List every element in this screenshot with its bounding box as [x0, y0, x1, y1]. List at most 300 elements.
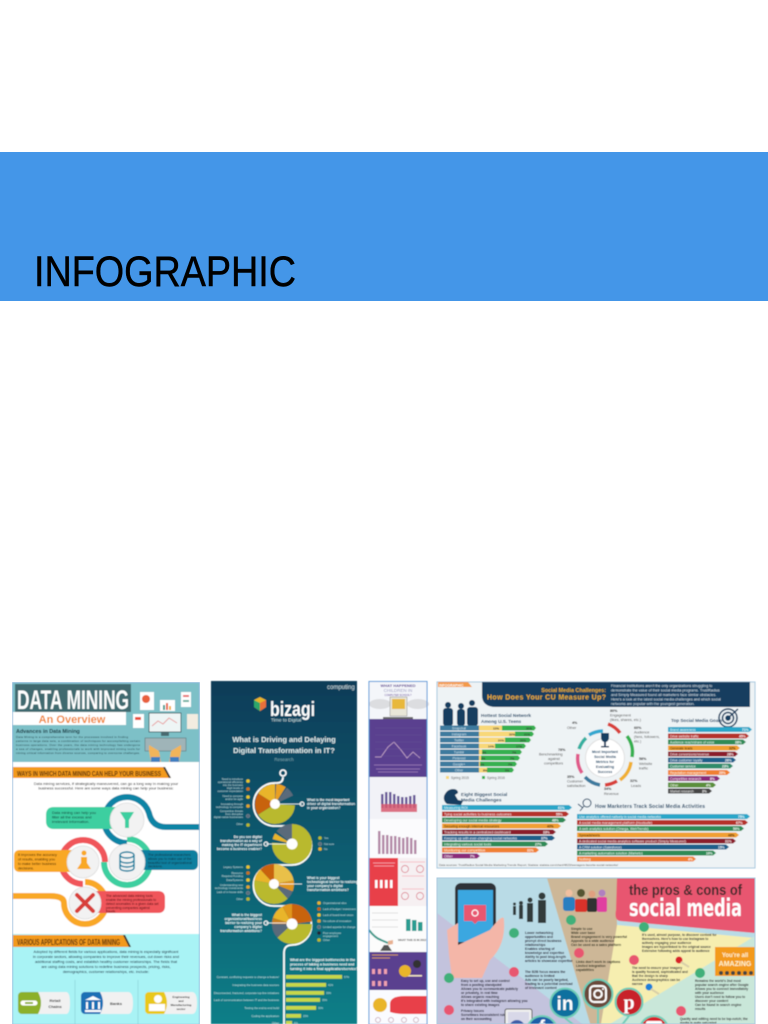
donut 4 callout: company's digital: [234, 925, 262, 929]
title band: [0, 152, 768, 301]
donut 3 legend: Lack of in-house skills: [217, 890, 244, 894]
radial metrics: Success: [598, 770, 612, 774]
text: twitter pros and cons: The B2B focus means the: [525, 970, 565, 974]
radial metrics: Customer: [567, 780, 584, 784]
bars: goals: Drive customer loyalty: [670, 758, 703, 762]
card: banks: Banks: [110, 1001, 123, 1006]
donut 4 legend: Lack of budget / investment: [323, 907, 356, 911]
text: twitter pros and cons: audience is limited: [525, 974, 554, 978]
marker: start ring: [280, 770, 286, 776]
stacked bars: teens: Instagram: [452, 732, 467, 736]
heading: What is Driving and Delaying: [232, 735, 336, 744]
badge: you're all amazing: AMAZING: [719, 961, 752, 968]
donut 4 legend: Lack of board-level vision: [323, 913, 354, 917]
bar chart heading: [290, 958, 358, 971]
bars: challenges: Tying social activities to business outcomes: [444, 812, 512, 816]
bars: challenges: Integrating various social tools: [444, 842, 491, 846]
donut 2 callout: [217, 835, 286, 851]
bars: challenges: 55%: [556, 812, 563, 816]
text: facebook pros and cons: to share existing images: [461, 1003, 500, 1007]
radial metrics: 4%: [572, 721, 578, 725]
text: facebook pros and cons: Sometimes inconsistent rules: [461, 1013, 508, 1017]
radial metrics: 34%: [604, 787, 612, 791]
stacked bars: teens: [440, 726, 536, 772]
text: instagram pros and cons: Simple to use: [571, 927, 593, 931]
text: youtube pros and cons: discover your content: [695, 999, 729, 1003]
donut 1 legend: [214, 777, 250, 827]
bar chart: 15%: [303, 1014, 309, 1018]
text: instagram pros and cons: Brand engagement is very powerful: [571, 935, 627, 939]
text: instagram pros and cons: Limited integration: [576, 964, 606, 968]
text: youtube pros and cons: Allows you to connect immediately: [695, 987, 748, 991]
radial metrics: Engagement: [610, 714, 631, 718]
connector stems: [565, 1009, 629, 1024]
section: applications: demographics, customer relationships, etc. include:: [63, 970, 149, 974]
title block: [616, 878, 755, 933]
donut 1 legend: Need to introduce: [222, 777, 244, 781]
text: youtube pros and cons: Users don't need to follow you to: [695, 995, 745, 999]
bars: track: 50%: [733, 827, 740, 831]
icons: pros and cons badges: [444, 915, 705, 1016]
bars: goals: 4%: [706, 784, 711, 788]
donut 3 callout: What is your biggest: [307, 876, 340, 880]
panel: social media challenges: [437, 682, 755, 868]
step: accuracy: decisions.: [18, 866, 34, 870]
card: retail chains: Retail: [50, 998, 60, 1003]
text: twitter pros and cons: Lower networking: [525, 931, 553, 935]
bars: track: A web analytics solution (Omega, WebTrends): [579, 827, 649, 831]
donut 1: [265, 794, 285, 814]
text: youtube pros and cons: [680, 979, 749, 1024]
header block: An Overview: [39, 714, 106, 726]
donut 3 callout: [280, 876, 358, 892]
bars: challenges: Developing our social media strategy: [444, 818, 502, 822]
header block: DATA MINING: [17, 685, 129, 715]
bars: track: 31%: [725, 840, 732, 844]
bars: goals: 28%: [727, 752, 734, 756]
text: instagram pros and cons: Can be used as a sales platform: [571, 943, 621, 947]
radial metrics: Metrics for: [596, 760, 615, 764]
bars: challenges: Securing enough internal resources: [444, 824, 500, 828]
donut 3 legend: Legacy Systems: [223, 865, 244, 869]
bars: track: A marketing automation solution (Marketo): [579, 852, 643, 856]
section: bar charts: [369, 777, 427, 858]
bars: track: A social media management platform (Hootsuite): [579, 821, 652, 825]
radial metrics: Evaluating: [596, 765, 614, 769]
step: filter: irrelevant information.: [52, 819, 89, 824]
snake path: [254, 777, 312, 1024]
stacked bars: teens: 35%: [526, 726, 532, 730]
text: youtube pros and cons: popular search engine after Google: [695, 983, 749, 987]
heading: hottest networks: Among U.S. Teens: [481, 719, 522, 724]
bars: track: Use analytics offered natively in social media networks: [579, 815, 661, 819]
donut 3 callout: technological barrier to realizing: [307, 880, 358, 884]
stacked bars: teens: Google+: [453, 762, 465, 766]
step: database: [109, 844, 198, 880]
header block: mining critical information from diverse sources, comparing to overcome challenges.: [16, 751, 140, 755]
text: twitter pros and cons: knowledge and expertise: [525, 951, 564, 955]
text: pinterest pros and cons: Images are hyperlinked to the original source: [642, 945, 711, 949]
bars: challenges: 61%: [558, 806, 565, 810]
bars: challenges: Other: [444, 854, 454, 858]
radial metrics: 35%: [567, 775, 575, 779]
text: twitter pros and cons: leading to a potential overload: [525, 982, 573, 986]
bars: goals: Reputation management: [670, 771, 706, 775]
text: pinterest pros and cons: actively engaging your audience: [642, 941, 691, 945]
bar chart: Constant, conflicting requests to change a feature/: [217, 975, 279, 979]
stacked bars: teens: 32%: [509, 732, 515, 736]
step: tools: frauds.: [106, 910, 116, 914]
radial metrics: traffic: [639, 766, 648, 770]
stacked bars: teens: 24%: [498, 738, 504, 742]
text: pinterest pros and cons: is quality focused, sophisticated and: [632, 970, 688, 974]
text: twitter pros and cons: articles to showcase expertise: [525, 959, 573, 963]
bars: goals: Brand awareness: [670, 728, 696, 732]
donut 2 callout: Do you see digital: [234, 835, 262, 839]
donut 1 callout: What is the most important: [307, 798, 350, 802]
bars: goals: 38%: [735, 740, 742, 744]
flow diagram: ways: [12, 797, 200, 924]
icon: instagram: [584, 980, 612, 1008]
bars: track: 75%: [738, 815, 745, 819]
stacked bars: teens: Other: [455, 768, 464, 772]
icon: linkedin: in: [557, 994, 573, 1015]
text: facebook pros and cons: Allows you to communicate publicly: [461, 987, 518, 991]
donut 4 callout: [220, 913, 286, 933]
heading: [232, 735, 336, 755]
legend: Spring 2016: [487, 776, 505, 780]
radial metrics: (likes, shares, etc.): [610, 718, 641, 722]
text: twitter pros and cons: Ability to post blog-length: [525, 955, 566, 959]
donut 2 callout: transformation as a way of: [220, 839, 263, 843]
donut 2 callout: become a business enabler?: [217, 847, 262, 851]
header block: a sea of changes, enabling professionals to work with improved mining tools for: [16, 747, 140, 751]
text: twitter pros and cons: [525, 931, 573, 990]
legend: [446, 776, 505, 780]
icon: red pin: [676, 956, 689, 967]
text: facebook pros and cons: from a posting standpoint: [461, 983, 503, 987]
stacked bars: teens: 7%: [510, 756, 515, 760]
section: teal chart: WHAT THIS IS IN 2012: [398, 938, 427, 942]
donut 1 legend: Innovating through: [221, 802, 244, 806]
bars: track: 4%: [688, 858, 693, 862]
donut 1 legend: operational efficiency: [218, 780, 244, 784]
donut 3 callout: your company's digital: [307, 884, 343, 888]
text: youtube pros and cons: results: [695, 1007, 706, 1011]
text: instagram pros and cons: [571, 927, 627, 972]
radial metrics: [539, 709, 660, 796]
donut 1 legend: Competitive threats: [220, 809, 244, 813]
radial metrics: (fans, followers,: [634, 735, 660, 739]
bar chart heading: process of taking a business need and: [290, 962, 354, 966]
step: filter: [46, 803, 144, 837]
donut 2 callout: making the IT department: [222, 843, 263, 847]
icon: pinterest: p: [623, 992, 635, 1014]
bars: challenges: Monitoring our competition: [444, 848, 485, 852]
banner: How Does Your CU Measure Up?: [487, 694, 606, 702]
radial metrics: Social Media: [594, 755, 617, 759]
step: database: The professional researchers: [148, 853, 191, 857]
radial metrics: against: [548, 757, 560, 761]
bar chart: 57%: [344, 975, 350, 979]
step: tools: detect anomalies in a given data set: [106, 902, 159, 906]
text: facebook pros and cons: [461, 979, 528, 1021]
intro text: business successful. Here are some ways data mining can help your business:: [38, 786, 174, 790]
donut 4 callout: barrier to realizing your: [225, 921, 263, 925]
banner: Social Media Challenges:: [541, 688, 606, 694]
badge: you're all amazing: You're all: [722, 953, 748, 959]
stacked bars: teens: Pinterest: [452, 756, 466, 760]
intro text: Data mining services, if strategically maneuvered, can go a long way in making your: [34, 781, 179, 786]
section: red statistics: [369, 858, 427, 906]
text: facebook pros and cons: Privacy issues: [461, 1009, 484, 1013]
donut 4 callout: What is the biggest: [232, 913, 263, 917]
donut 4 legend: Limited appetite for change: [323, 925, 356, 929]
bars: track: A CRM solution (Salesforce): [579, 846, 622, 850]
tag: INFOGRAPHIC: [439, 684, 464, 688]
step: tools: The advanced data mining tools: [106, 894, 153, 898]
icon: phone in hand: [447, 883, 504, 978]
section: line chart: [369, 719, 427, 777]
donut 1 callout: in your organization?: [307, 806, 341, 810]
section: applications: Adopted by different fields for various applications, data mining is especially significant: [34, 950, 179, 954]
bars: challenges: 7%: [470, 854, 475, 858]
text: instagram pros and cons: Wide user base: [571, 931, 595, 935]
header block: Advances in Data Mining: [16, 729, 80, 735]
donut 4 legend: No culture of innovation: [323, 919, 352, 923]
donut 3 legend: Data/Systems: [226, 878, 244, 882]
card: engineering: Engineering: [172, 995, 190, 999]
bar chart: 39%: [326, 991, 332, 995]
text: facebook pros and cons: on their accounting: [461, 1017, 492, 1021]
donut 2: [282, 834, 302, 854]
bars: challenges: 40%: [547, 824, 554, 828]
donut 1 legend: digital-native businesses: [214, 815, 244, 819]
text: facebook pros and cons: Allows organic reaching: [461, 995, 499, 999]
text: youtube pros and cons: Quality and editing need to be top-notch; the: [680, 1017, 748, 1021]
subheading: Research: [274, 757, 294, 762]
radial metrics: 32%: [630, 779, 638, 783]
text: twitter pros and cons: of irrelevant content: [525, 986, 558, 990]
section: speech bubble: [369, 990, 427, 1024]
bar chart: Integrating the business data sources: [232, 983, 280, 987]
text: twitter pros and cons: Ads can be poorly targeted,: [525, 978, 569, 982]
radial metrics: satisfaction: [567, 784, 585, 788]
icon: facebook: [527, 1016, 557, 1024]
radial metrics: Audience: [634, 730, 649, 734]
donut 1 legend: into the business: [223, 783, 244, 787]
text: twitter pros and cons: relationships: [525, 943, 546, 947]
step: accuracy: It improves the accuracy: [18, 853, 57, 857]
bars: goals: Generate leads: [670, 746, 693, 750]
donut 3: [264, 874, 284, 894]
icon: influencer figures: [513, 892, 546, 923]
bars: track: 67%: [736, 821, 743, 825]
text: facebook pros and cons: It's integrated with Instagram allowing you: [461, 999, 528, 1003]
banner: ways: [12, 767, 171, 778]
bizagi wordmark: bizagi: [270, 699, 315, 721]
bar chart: 35%: [322, 998, 328, 1002]
card: banks: [81, 992, 133, 1014]
donut 4 legend: [317, 901, 356, 942]
donut 4 legend: Poor employee: [323, 931, 342, 935]
text: facebook pros and cons: or privately, in real time: [461, 991, 498, 995]
stacked bars: teens: 2%: [481, 756, 486, 760]
text: pinterest pros and cons: It's used, almost purpose, to discover content for: [642, 933, 717, 937]
card: engineering: [145, 992, 197, 1014]
panel: tall purple infographic: [369, 681, 429, 1024]
radial metrics: Leads: [631, 784, 641, 788]
stacked bars: teens: 20%: [520, 738, 526, 742]
icon: group of people: [563, 889, 607, 912]
banner: Financial institutions aren't the only organizations struggling to: [611, 684, 712, 688]
stacked bars: teens: Facebook: [452, 744, 467, 748]
heading: challenges: [444, 789, 507, 805]
bars: challenges: 31%: [527, 848, 534, 852]
section: applications: are using data mining solutions to redefine business prospects, pricing, risks,: [41, 965, 171, 969]
donut 1 legend: High levels of: [227, 786, 243, 790]
banner: [482, 682, 750, 707]
tagline: Time to Digital: [271, 718, 301, 724]
badge: you're all amazing: [715, 947, 755, 976]
bars: track: 46%: [728, 834, 735, 838]
intro text: [34, 781, 179, 790]
text: pinterest pros and cons: narrow: [632, 982, 643, 986]
bars: goals: 8%: [710, 777, 715, 781]
donut 1 legend: technology to compete: [216, 805, 244, 809]
text: facebook pros and cons: Easy to set up, use and control: [461, 979, 510, 983]
donut 3 callout: transformation ambitions?: [307, 888, 349, 892]
bars: goals: Market research: [670, 790, 694, 794]
donut 1 legend: from disruptive: [225, 812, 244, 816]
card: engineering: and: [178, 999, 184, 1003]
heading and computer: COMPUTER SCHOOL?: [385, 694, 412, 697]
icon: target: [719, 709, 738, 727]
title block: the pros & cons of: [629, 882, 743, 899]
text: pinterest pros and cons: that the design is sharp: [632, 974, 668, 978]
bars: track: [577, 814, 750, 862]
bar chart: Disconnected, fractured, corporate top-line initiatives: [214, 991, 280, 995]
radial metrics: 58%: [639, 757, 647, 761]
radial metrics: 60%: [634, 726, 642, 730]
donut 4 legend: Other: [323, 938, 330, 942]
section: applications: VARIOUS APPLICATIONS OF DATA MINING: [17, 938, 120, 947]
bar chart: Coding the application: [251, 1014, 279, 1018]
bar chart: Testing the end-to-end build: [244, 1006, 279, 1010]
stacked bars: teens: Tumblr: [454, 750, 465, 754]
bars: track: Spreadsheets: [579, 834, 600, 838]
text: instagram pros and cons: Appeals to a wide audience: [571, 939, 614, 943]
donut 1 legend: Other: [236, 822, 243, 826]
stacked bars: teens: 1%: [480, 762, 485, 766]
bars: goals: 45%: [739, 734, 746, 738]
donut 1 callout: driver of digital transformation: [307, 802, 355, 806]
bars: challenges: 27%: [535, 842, 542, 846]
bars: goals: Other: [670, 784, 679, 788]
text: pinterest pros and cons: Audience demographics can be: [632, 978, 680, 982]
icon: linkedin: [550, 988, 580, 1018]
bars: track: 15%: [718, 846, 725, 850]
stacked bars: teens: 7%: [508, 762, 513, 766]
heading: track: How Marketers Track Social Media Activities: [595, 804, 705, 810]
step: accuracy: to make better business: [18, 862, 56, 866]
stacked bars: teens: 7%: [512, 750, 517, 754]
text: youtube pros and cons: Remains the world's 2nd most: [695, 979, 742, 983]
step: accuracy: [14, 846, 99, 878]
banner: and Simply Measured found all marketers face similar obstacles.: [611, 693, 716, 697]
text: youtube pros and cons: with your audience: [694, 991, 724, 995]
panel: data mining infographic: [12, 682, 200, 1024]
text: instagram pros and cons: Links don't work in captions: [576, 960, 621, 964]
bars: goals: 3%: [702, 790, 707, 794]
text: twitter pros and cons: opportunities and: [525, 935, 553, 939]
stacked bars: teens: 13%: [493, 726, 499, 730]
banner: networks are popular with the youngest generation.: [611, 702, 695, 706]
donut 2 legend: Not sure: [324, 842, 335, 846]
stacked bars: teens: 17%: [516, 744, 522, 748]
step: database: beautiful tool of organizational: [148, 861, 192, 865]
bars: goals: Competitive research: [670, 777, 701, 781]
bars: goals: 32%: [729, 746, 736, 750]
stacked bars: teens: 14%: [488, 744, 494, 748]
header block: [12, 682, 200, 762]
stacked bars: teens: 5%: [505, 768, 510, 772]
computing logo: computing: [327, 685, 355, 691]
bars: goals: Drive conversions/revenue: [670, 752, 709, 756]
step: accuracy: of results, enabling you: [18, 858, 55, 862]
bars: goals: Customer service: [670, 764, 696, 768]
donut 3 legend: Required Funding: [222, 874, 243, 878]
banner: demonstrate the value of their social media programs. TrustRadius: [611, 688, 720, 692]
stacked bars: teens: 8%: [483, 768, 488, 772]
section: applications: in corporate sectors, allowing companies to improve their revenues, cut down risks and: [33, 955, 179, 959]
radial metrics: 80%: [610, 709, 618, 713]
heading and computer: WHAT HAPPENED: [380, 683, 416, 688]
bars: track: A dedicated social media analytics software product (Simply Measured): [579, 840, 686, 844]
donut 1 legend: customer expectation: [217, 789, 244, 793]
bar chart: Lack of communication between IT and the business: [214, 998, 280, 1002]
donut 3 legend: Understanding new: [220, 883, 243, 887]
icon: pinterest: [616, 988, 642, 1016]
heading and computer: CHILDREN IN: [384, 688, 412, 693]
radial metrics: Benchmarking: [539, 752, 563, 756]
legend: Spring 2015: [451, 776, 469, 780]
panel: pros and cons of social media: [437, 878, 755, 1024]
wedge backgrounds: [437, 878, 755, 1024]
donut 1 legend: Need to compete: [223, 794, 244, 798]
donut 1 legend: and/or be agile: [225, 797, 244, 801]
panel: bizagi infographic: [211, 681, 358, 1024]
donut 2 legend: [318, 836, 335, 851]
stacked bars: teens: 21%: [524, 732, 530, 736]
heading: hottest networks: Hottest Social Network: [481, 713, 531, 718]
bar chart heading: What are the biggest bottlenecks in the: [290, 958, 355, 962]
icon: bizagi logo: [254, 697, 266, 711]
radial metrics: Other: [567, 726, 577, 730]
bars: goals: 23%: [722, 764, 729, 768]
donut 3 legend: technology investments: [215, 886, 244, 890]
bar chart: 30%: [318, 1006, 324, 1010]
radial metrics: competitors: [544, 762, 563, 766]
icon: computer and charts: [133, 692, 198, 762]
step: database: decisions.: [148, 864, 163, 868]
donut 4 legend: Organizational silos: [323, 901, 347, 905]
card: retail chains: [18, 992, 70, 1014]
icon: youtube: [640, 1016, 668, 1024]
card: engineering: Manufacturing: [171, 1003, 191, 1007]
icon: blue pin: [646, 984, 659, 994]
step: tools: [69, 887, 165, 919]
